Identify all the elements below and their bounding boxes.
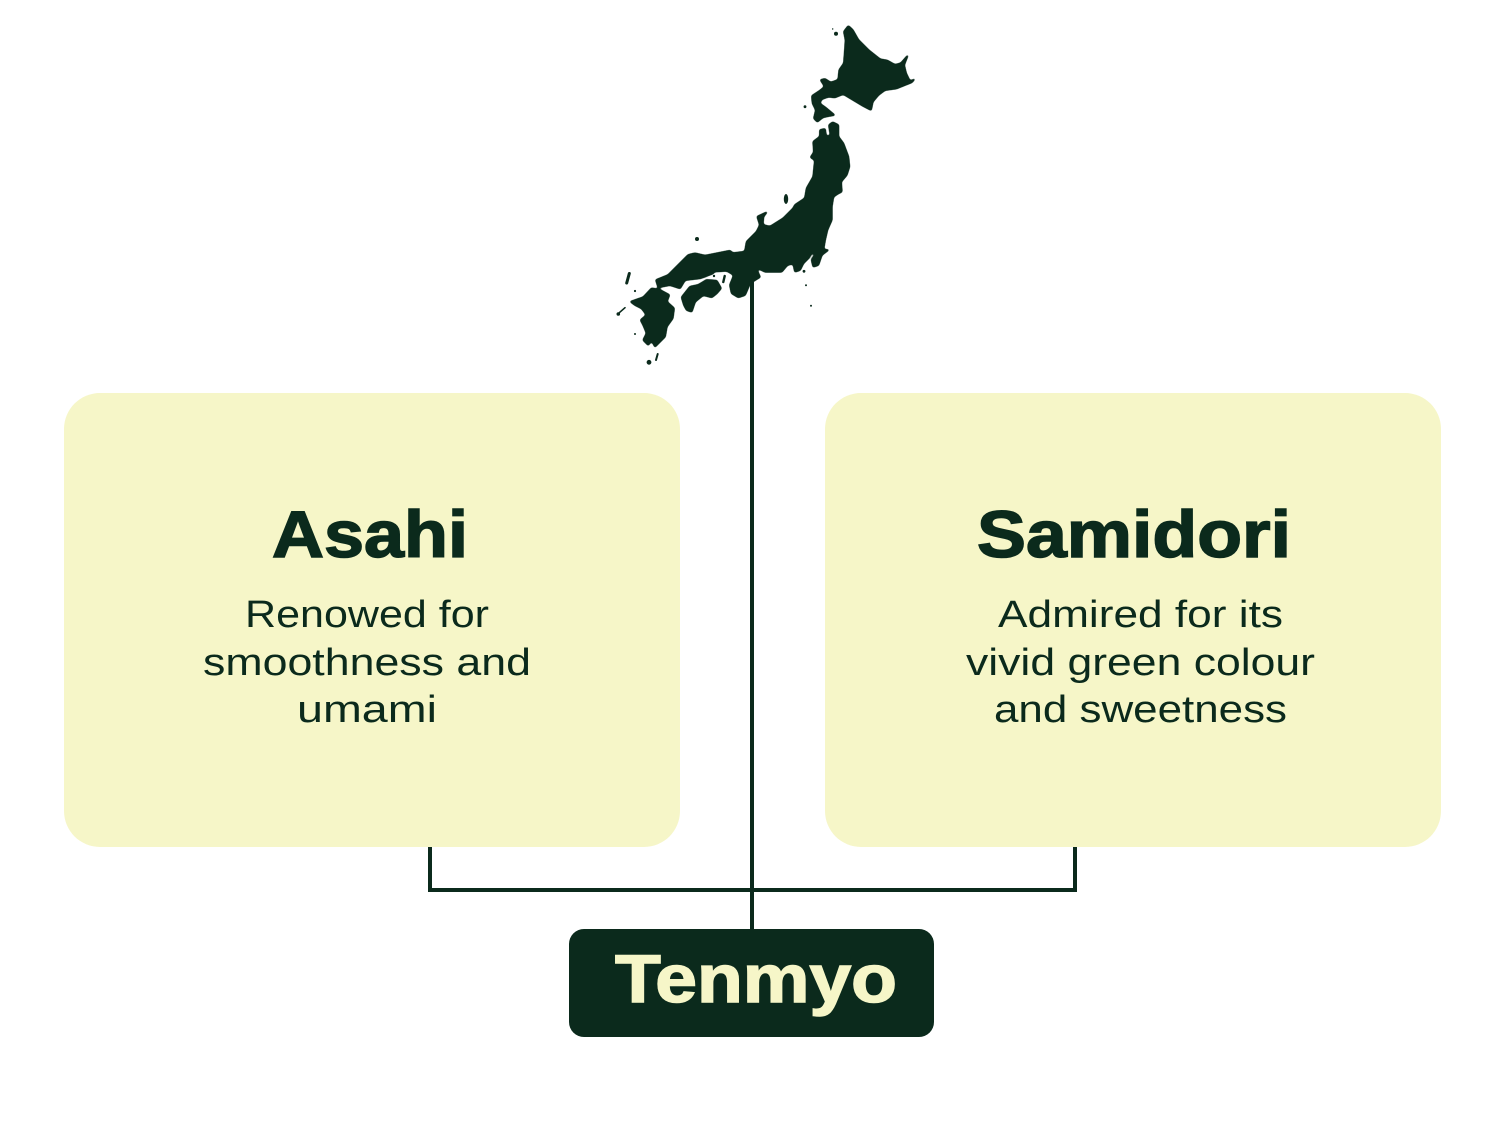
Hokkaido [812, 26, 914, 122]
heading: Asahi: Asahi [272, 497, 468, 571]
label box: Tenmyo: Tenmyo [615, 941, 897, 1017]
panel: Asahi [64, 393, 680, 847]
map of Japan [616, 26, 914, 365]
Kyushu [631, 288, 674, 347]
heading: Samidori: Samidori [977, 497, 1291, 571]
text block: Samidori description: vivid green colour [966, 642, 1315, 684]
text block: Samidori description: and sweetness [994, 689, 1287, 731]
text block: Asahi description: smoothness and [203, 642, 531, 684]
text block: Asahi description: Renowed for [245, 594, 489, 636]
Honshu [656, 122, 849, 297]
text block: Asahi description: umami [297, 689, 437, 731]
panel: Samidori [825, 393, 1441, 847]
text block: Samidori description: Admired for its [998, 594, 1283, 636]
Shikoku [682, 280, 721, 312]
main islands [631, 26, 914, 347]
text block: Asahi description [203, 594, 531, 731]
text block: Samidori description [966, 594, 1315, 731]
label box: Tenmyo [569, 929, 934, 1037]
small islands [616, 28, 838, 365]
connector lines [430, 270, 1075, 930]
